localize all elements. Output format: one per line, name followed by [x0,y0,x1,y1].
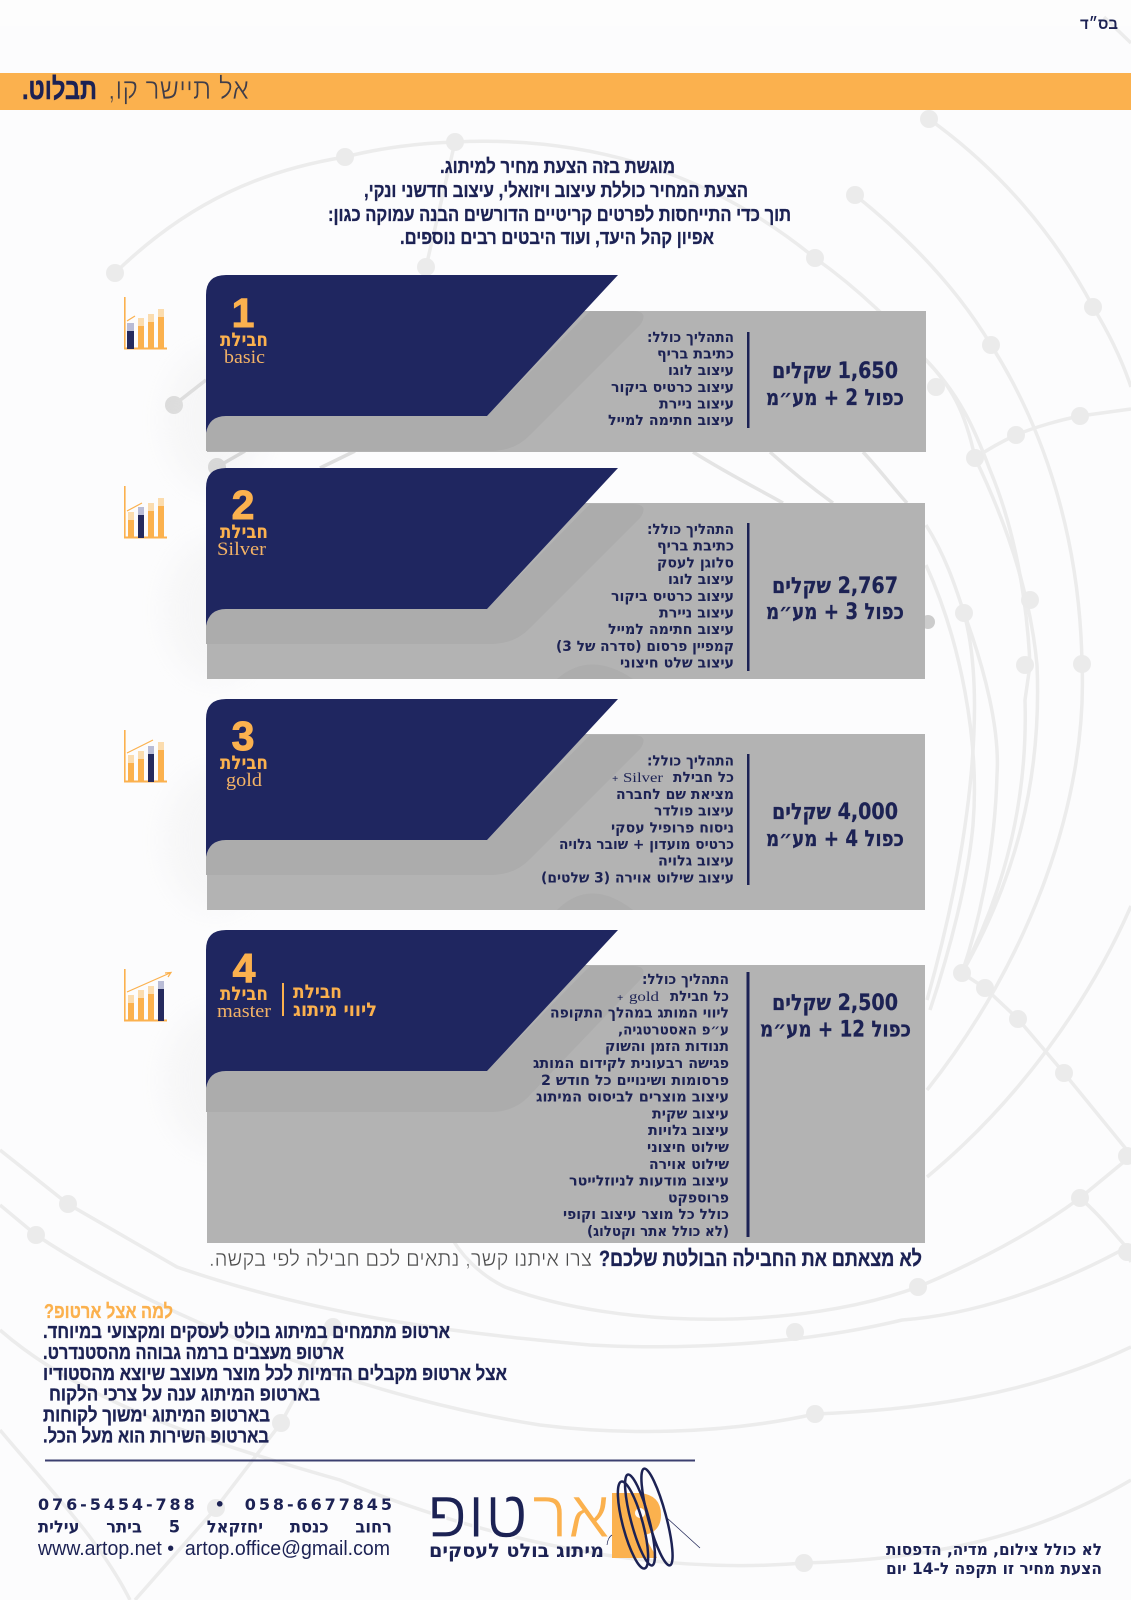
price: כפול 2 + מע״מ [766,386,904,411]
intro paragraph: מוגשת בזה הצעת מחיר למיתוג. [440,156,675,178]
icon: bar chart 2 [124,486,167,538]
feature list: מציאת שם לחברה [616,787,734,803]
heading: למה אצל ארטופ? [44,1301,173,1323]
validity note: לא כולל צילום, מדיה, הדפסות [886,1540,1102,1559]
feature list: עיצוב פולדר [654,804,734,820]
contact details [37,1495,392,1560]
darker flap [206,311,644,451]
intro paragraph: תוך כדי התייחסות לפרטים קריטיים הדורשים הבנה עמוקה כגון: [328,204,791,226]
reasons: ארטופ מתמחים במיתוג בולט לעסקים ומקצועי במיוחד. [43,1321,450,1343]
feature list: Silver [623,771,663,786]
price: 2,500 שקלים [772,991,898,1016]
price: 4,000 שקלים [772,800,898,825]
validity note [886,1540,1102,1578]
darker flap [206,966,644,1112]
price [766,574,904,625]
feature list: כתיבת בריף [657,346,734,362]
price: 1,650 שקלים [772,359,898,384]
price: כפול 3 + מע״מ [766,600,904,625]
logo: טופ [427,1476,528,1552]
price [766,800,904,852]
feature list: עיצוב מודעות לניוזלייטר [569,1174,729,1190]
title bold part: תבלוט. [22,73,97,106]
tab label [217,945,377,1022]
feature list [533,972,729,1240]
tab label: gold [226,770,263,791]
feature list: עיצוב לוגו [668,363,734,379]
gray panel [207,311,926,452]
custom package note: צרו איתנו קשר, נתאים לכם חבילה לפי בקשה. [209,1246,592,1271]
feature list: + [612,773,618,785]
tab label: חבילת [220,752,268,774]
feature list: ניסוח פרופיל עסקי [611,820,734,836]
icon: bar chart 4 [124,969,171,1022]
feature list: עיצוב שלט חיצוני [620,656,734,672]
tab label: 1 [232,290,254,336]
tab label: basic [224,347,265,368]
title light part: אל תיישר קו, [108,73,249,106]
logo mark [607,1466,700,1571]
feature list: התהליך כולל: [642,972,729,988]
feature list: כל חבילת [673,770,734,786]
feature list: ע״פ האסטרטגיה, [618,1022,729,1038]
feature list: קמפיין פרסום (סדרה של 3) [556,639,734,655]
feature list: + [617,992,623,1004]
tab label: חבילת [293,981,342,1003]
feature list: כתיבת בריף [657,539,734,555]
why artop block: בארטופ המיתוג ימשוך לקוחות [43,1405,270,1427]
panel 4: master [206,930,925,1243]
feature list: התהליך כולל: [647,522,734,538]
gray panel [207,503,925,679]
navy tab [206,468,618,626]
feature list: (לא כולל אתר וקטלוג) [587,1224,729,1240]
darker flap [206,735,644,875]
navy tab [206,275,618,433]
feature list: gold [629,990,659,1005]
tab label: master [217,1001,272,1022]
price: 2,767 שקלים [772,574,898,599]
feature list: התהליך כולל: [647,754,734,770]
custom package note: לא מצאתם את החבילה הבולטת שלכם? [599,1246,922,1271]
header mark: בס״ד [1080,16,1118,33]
tab label [220,713,268,791]
tab label: חבילת [220,329,268,351]
darker flap [206,504,644,644]
feature list: עיצוב שקית [652,1106,729,1122]
tab label: 4 [233,945,256,991]
contact details: רחוב כנסת יחזקאל 5 ביתר עילית [38,1518,392,1538]
intro paragraph [328,156,791,249]
feature list: עיצוב ניירת [659,396,734,412]
price [760,991,911,1042]
logo [427,1466,700,1571]
panel 3: gold [206,699,925,910]
icon: bar chart 3 [124,730,167,782]
logo wordmark: אר [532,1476,610,1552]
orange title band [0,73,1131,110]
logo tagline: מיתוג בולט לעסקים [429,1540,604,1562]
feature list: פרסומות ושינויים כל חודש 2 [541,1073,729,1089]
tab label: ליווי מיתוג [293,999,377,1021]
icon: bar chart 1 [124,297,167,350]
feature list: עיצוב כרטיס ביקור [611,589,734,605]
feature list: תנודות הזמן והשוק [605,1039,729,1055]
feature list: כל חבילת [670,989,729,1005]
navy tab [206,930,618,1088]
feature list: עיצוב כרטיס ביקור [611,380,734,396]
tab label: 3 [232,713,254,759]
tab label: Silver [217,539,267,560]
navy tab [206,699,618,857]
tab label [220,290,268,368]
tab label: 2 [232,482,254,528]
why artop block: בארטופ השירות הוא מעל הכל. [43,1426,269,1448]
validity note: הצעת מחיר זו תקפה ל-14 יום [886,1559,1102,1578]
why artop block: ארטופ מעצבים ברמה גבוהה מהסטנדרט. [43,1342,344,1364]
custom package note [209,1246,922,1271]
feature list: עיצוב ניירת [659,606,734,622]
gray panel [207,965,925,1243]
why artop block: בארטופ המיתוג ענה על צרכי הלקוח [49,1384,320,1406]
feature list: כולל כל מוצר עיצוב וקופי [563,1207,729,1223]
why artop block: אצל ארטופ מקבלים הדמיות לכל מוצר מעוצב שיוצא מהסטודיו [43,1363,507,1385]
feature list: ליווי המותג במהלך התקופה [550,1006,729,1022]
feature list: כרטיס מועדון + שובר גלויה [559,837,734,853]
price: כפול 4 + מע״מ [766,827,904,852]
feature list: שילוט אוירה [649,1157,729,1173]
feature list: עיצוב לוגו [668,572,734,588]
contact details: 076-5454-788 • 058-6677845 [38,1495,392,1514]
panel 1: basic [206,275,926,452]
feature list: התהליך כולל: [647,330,734,346]
tab label [217,482,268,560]
feature list: עיצוב שילוט אוירה (3 שלטים) [541,870,734,886]
feature list [608,330,734,429]
tab label: חבילת [220,983,268,1005]
panel 2: silver [206,468,925,679]
intro paragraph: הצעת המחיר כוללת עיצוב ויזואלי, עיצוב חדשני ונקי, [364,180,748,202]
price [766,359,904,411]
intro paragraph: אפיון קהל היעד, ועוד היבטים רבים נוספים. [400,227,714,249]
feature list: פרוספקט [668,1190,729,1206]
feature list: פגישה רבעונית לקידום המותג [533,1056,729,1072]
feature list: עיצוב חתימה למייל [608,622,734,638]
feature list: שילוט חיצוני [647,1140,729,1156]
feature list: עיצוב מוצרים לביסוס המיתוג [536,1090,729,1106]
feature list [541,754,734,886]
feature list: עיצוב גלויות [648,1123,729,1139]
feature list [556,522,734,672]
why artop block [43,1301,507,1448]
feature list: עיצוב גלויה [658,854,734,870]
contact details: www.artop.net • artop.office@gmail.com [37,1538,390,1560]
tab label: חבילת [220,521,268,543]
feature list: סלוגן לעסק [657,555,734,571]
price: כפול 12 + מע״מ [760,1018,911,1042]
gray panel [207,734,925,910]
feature list: עיצוב חתימה למייל [608,413,734,429]
